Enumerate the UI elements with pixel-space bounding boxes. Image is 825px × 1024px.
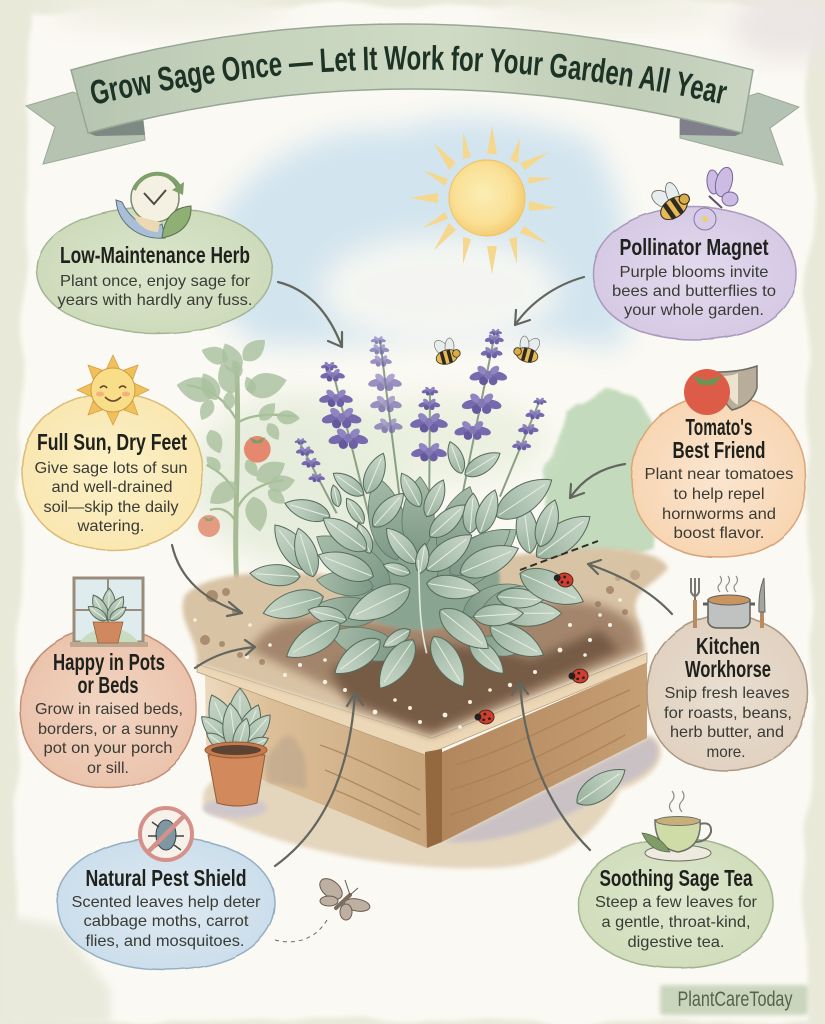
title banner <box>25 23 800 166</box>
callout: happy in pots: or Beds <box>78 672 138 698</box>
callout: kitchen workhorse: Kitchen <box>696 633 760 659</box>
callout: soothing tea: Steep a few leaves for <box>595 894 758 911</box>
callout: happy in pots: Grow in raised beds, <box>35 701 183 718</box>
bee right <box>512 332 544 365</box>
arrow: low maintenance to plant <box>278 282 342 347</box>
callout: pollinator <box>593 207 796 340</box>
callout: soothing tea: digestive tea. <box>628 934 724 951</box>
fallen leaf <box>570 760 632 813</box>
callout: full sun: Give sage lots of sun <box>34 460 187 477</box>
icon: clock and leaf <box>116 174 191 238</box>
potted sage <box>195 688 277 806</box>
icon: window with pot <box>70 578 148 647</box>
flower spikes <box>294 328 547 482</box>
callout: tomato best friend: hornworms and <box>662 506 776 523</box>
bee left <box>430 334 462 367</box>
soil bed <box>183 548 668 738</box>
dashed line <box>520 541 598 570</box>
sage plant <box>249 328 598 695</box>
callout: full sun: soil—skip the daily <box>44 499 178 516</box>
callout: tomato best friend: Tomato's <box>686 414 752 440</box>
callout: tomato best friend <box>632 395 806 557</box>
callout: kitchen workhorse: herb butter, and <box>670 724 784 741</box>
tomatoes <box>198 436 271 537</box>
callout: pest shield: Natural Pest Shield <box>86 865 246 891</box>
callout: tomato best friend: Plant near tomatoes <box>644 466 794 483</box>
arrow: tea to plant <box>512 683 590 850</box>
background garden foliage <box>190 391 655 565</box>
arrow: pots to bed <box>195 640 255 668</box>
watermark <box>660 985 808 1015</box>
title: Grow Sage Once — Let It Work for Your Garden All Year <box>90 45 728 104</box>
callout: full sun <box>22 393 203 550</box>
ground under the bed <box>203 735 661 868</box>
icon: pot and utensils <box>691 576 765 628</box>
icon: tea cup <box>642 791 711 861</box>
callout: tomato best friend: to help repel <box>674 486 764 503</box>
arrow: tomato to plant <box>570 464 625 498</box>
ladybug on bed rim <box>474 710 494 724</box>
tomato leaves <box>174 333 300 534</box>
arrow: kitchen to leaf <box>588 560 672 614</box>
arrow: pollinator to flowers <box>515 277 584 325</box>
callout: pollinator: your whole garden. <box>624 302 764 319</box>
callout: low maintenance: years with hardly any fuss. <box>58 292 252 309</box>
callout: full sun: Full Sun, Dry Feet <box>37 429 187 455</box>
callout: full sun: and well-drained <box>52 479 172 496</box>
callout: soothing tea: a gentle, throat-kind, <box>602 914 750 931</box>
callout: kitchen workhorse: more. <box>706 744 746 761</box>
callout: kitchen workhorse <box>647 615 807 771</box>
ladybug on bed edge <box>568 669 588 683</box>
callout: kitchen workhorse: Snip fresh leaves <box>664 685 790 702</box>
icon: no bug sign <box>140 808 192 860</box>
flower stems <box>300 333 540 533</box>
callout: happy in pots: borders, or a sunny <box>38 721 178 738</box>
arrow: full sun to soil <box>172 545 242 616</box>
sage leaves <box>249 439 598 695</box>
callout: pest shield: flies, and mosquitoes. <box>86 933 244 950</box>
callout: pollinator: bees and butterflies to <box>612 283 776 300</box>
icon: tomato and shield <box>684 366 757 415</box>
callout: happy in pots <box>20 628 196 788</box>
callout: low maintenance: Plant once, enjoy sage for <box>60 273 251 290</box>
stems <box>187 367 297 580</box>
callout: happy in pots: or sill. <box>87 760 129 777</box>
callout: kitchen workhorse: for roasts, beans, <box>664 705 792 722</box>
arrow: pest shield to plant <box>275 693 363 866</box>
callout: happy in pots: pot on your porch <box>44 740 172 757</box>
callout: pollinator: Purple blooms invite <box>620 264 769 281</box>
callout: full sun: watering. <box>76 518 144 535</box>
watercolor sky <box>205 118 630 350</box>
back foliage <box>306 472 537 668</box>
callout: low maintenance <box>37 207 272 333</box>
raised wooden bed <box>197 653 647 848</box>
icon: bee and butterfly <box>645 165 738 230</box>
watermark: PlantCareToday <box>678 988 793 1011</box>
callout: pest shield <box>57 837 275 970</box>
callout: pollinator: Pollinator Magnet <box>620 234 769 260</box>
tomato plant <box>174 333 300 580</box>
callout: tomato best friend: Best Friend <box>672 437 766 463</box>
callout: kitchen workhorse: Workhorse <box>685 656 771 682</box>
callout: happy in pots: Happy in Pots <box>53 649 165 675</box>
callout: soothing tea <box>578 838 773 968</box>
callout: soothing tea: Soothing Sage Tea <box>600 865 753 891</box>
ladybug on leaf <box>552 570 575 589</box>
sun <box>410 126 557 274</box>
callout: pest shield: Scented leaves help deter <box>72 894 261 911</box>
callout: pest shield: cabbage moths, carrot <box>84 913 249 930</box>
moth <box>275 875 371 942</box>
callout: tomato best friend: boost flavor. <box>674 525 764 542</box>
icon: smiling sun <box>77 355 149 425</box>
callout: low maintenance: Low-Maintenance Herb <box>60 242 250 268</box>
